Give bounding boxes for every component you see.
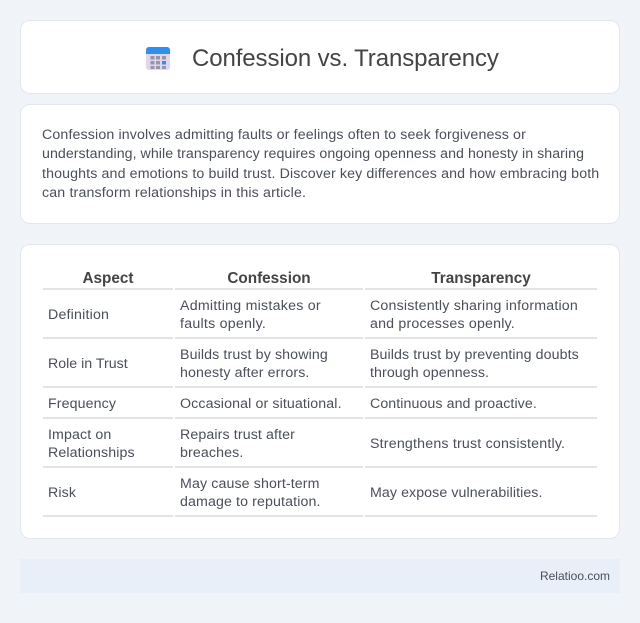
Role in Trust: transparency bbox=[370, 346, 579, 380]
Definition: transparency: Consistently sharing information bbox=[370, 298, 578, 314]
row: Role in Trust: Role in Trust bbox=[48, 356, 128, 372]
Risk: confession: damage to reputation. bbox=[180, 494, 321, 510]
header: Confession: Confession bbox=[227, 270, 311, 287]
Role in Trust: confession bbox=[180, 346, 328, 380]
Role in Trust: transparency: Builds trust by preventing doubts bbox=[370, 346, 579, 362]
Definition: transparency: and processes openly. bbox=[370, 316, 515, 332]
Impact: confession: breaches. bbox=[180, 444, 243, 460]
intro text bbox=[42, 126, 599, 201]
Impact: confession bbox=[180, 426, 295, 460]
row: Impact on Relationships: Relationships bbox=[48, 444, 135, 460]
row: Impact on Relationships bbox=[48, 426, 135, 460]
footer text: Relatioo.com bbox=[540, 569, 610, 583]
table card bbox=[20, 244, 620, 539]
row: Risk: Risk bbox=[48, 484, 76, 500]
Definition: confession: Admitting mistakes or bbox=[180, 298, 321, 314]
Risk: confession: May cause short-term bbox=[180, 476, 320, 492]
Risk: confession bbox=[180, 476, 321, 510]
intro text: thoughts and emotions to build trust. Discover key differences and how embracing both bbox=[42, 166, 599, 182]
Role in Trust: confession: Builds trust by showing bbox=[180, 346, 328, 362]
row: Impact on Relationships: Impact on bbox=[48, 426, 111, 442]
intro card bbox=[20, 104, 620, 224]
Definition: confession bbox=[180, 298, 321, 332]
header: Transparency: Transparency bbox=[431, 270, 531, 287]
Definition: confession: faults openly. bbox=[180, 316, 266, 332]
Impact: transparency: Strengthens trust consistently. bbox=[370, 436, 565, 452]
Frequency: transparency: Continuous and proactive. bbox=[370, 396, 537, 412]
Role in Trust: transparency: through openness. bbox=[370, 364, 489, 380]
intro text: can transform relationships in this article. bbox=[42, 185, 306, 201]
title: Confession vs. Transparency bbox=[192, 45, 499, 72]
row: Frequency: Frequency bbox=[48, 396, 116, 412]
title card bbox=[20, 20, 620, 94]
Definition: transparency bbox=[370, 298, 578, 332]
Impact: confession: Repairs trust after bbox=[180, 426, 295, 442]
header: Aspect: Aspect bbox=[82, 270, 134, 287]
icon: calendar bbox=[146, 47, 170, 70]
intro text: understanding, while transparency requires ongoing openness and honesty in sharing bbox=[42, 146, 584, 162]
Role in Trust: confession: honesty after errors. bbox=[180, 364, 309, 380]
row: Definition: Definition bbox=[48, 306, 109, 322]
footer bar bbox=[20, 559, 620, 593]
intro text: Confession involves admitting faults or feelings often to seek forgiveness or bbox=[42, 126, 526, 142]
Risk: transparency: May expose vulnerabilities. bbox=[370, 484, 542, 500]
Frequency: confession: Occasional or situational. bbox=[180, 396, 342, 412]
